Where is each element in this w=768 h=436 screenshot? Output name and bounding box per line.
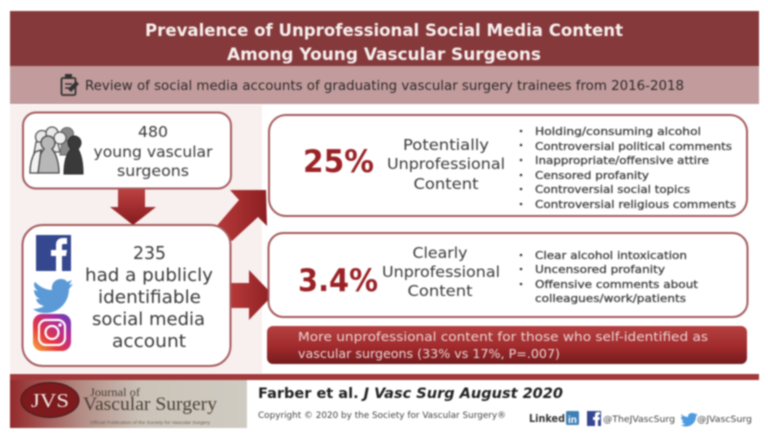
- citation: Farber et al. J Vasc Surg August 2020: [258, 386, 563, 402]
- list: clearly unprofessional items: Uncensored profanity: [535, 263, 666, 276]
- callout: self-identified vascular surgeons: vascular surgeons (33% vs 17%, P=.007): [298, 346, 560, 361]
- list: potentially unprofessional items: Controversial political comments: [535, 140, 732, 153]
- icon: instagram: [33, 314, 71, 351]
- heading: potentially unprofessional content: Potentially: [403, 136, 489, 154]
- list: potentially unprofessional items: [520, 125, 736, 211]
- box: 480 young vascular surgeons: 480: [138, 123, 168, 141]
- list: potentially unprofessional items: Controversial religious comments: [535, 198, 736, 211]
- subtitle band: [10, 66, 759, 104]
- icon: facebook: [36, 235, 71, 271]
- logo: Journal of Vascular Surgery: JVS: [31, 390, 69, 412]
- box: 480 young vascular surgeons: surgeons: [117, 162, 189, 180]
- social handles: @TheJVascSurg: [603, 415, 675, 425]
- title banner: [10, 11, 759, 66]
- stat: 3.4%: 3.4%: [298, 263, 378, 299]
- copyright: Copyright © 2020 by the Society for Vascular Surgery®: [258, 411, 506, 421]
- list: potentially unprofessional items: Censored profanity: [535, 169, 650, 182]
- box: 235 with social media account: 235: [133, 243, 166, 264]
- panel: clearly unprofessional content: [268, 233, 748, 317]
- title banner: Prevalence of Unprofessional Social Media Content: [145, 21, 623, 40]
- box: 235 with social media account: social media: [92, 309, 205, 330]
- box: 480 young vascular surgeons: [23, 112, 231, 188]
- icon: twitter bird: [33, 279, 73, 313]
- heading: clearly unprofessional content: Content: [408, 282, 472, 300]
- box: 235 with social media account: [22, 225, 230, 366]
- heading: clearly unprofessional content: [382, 244, 500, 300]
- title banner: Among Young Vascular Surgeons: [227, 45, 541, 64]
- footer rule: [10, 374, 759, 380]
- heading: potentially unprofessional content: Unprofessional: [387, 155, 505, 173]
- box: 235 with social media account: had a publicly: [85, 265, 213, 286]
- arrow: diagonal up-right: [215, 190, 267, 241]
- list: clearly unprofessional items: [520, 249, 699, 305]
- panel: potentially unprofessional content: [269, 115, 747, 216]
- arrow: down: [110, 188, 156, 225]
- callout: self-identified vascular surgeons: More unprofessional content for those who self-identified as: [298, 329, 708, 344]
- icon: clipboard: [62, 74, 79, 95]
- heading: clearly unprofessional content: Unprofessional: [382, 263, 500, 281]
- heading: clearly unprofessional content: Clearly: [412, 244, 468, 262]
- heading: potentially unprofessional content: Content: [414, 175, 478, 193]
- left panel background: [10, 105, 262, 373]
- subtitle band: Review of social media accounts of graduating vascular surgery trainees from 2016-2018: [85, 79, 684, 94]
- box: 235 with social media account: account: [112, 331, 186, 352]
- heading: potentially unprofessional content: [387, 136, 505, 193]
- icon: linkedin: [529, 411, 579, 426]
- logo: Journal of Vascular Surgery: Journal of: [90, 387, 140, 399]
- list: clearly unprofessional items: Offensive comments about: [535, 278, 699, 291]
- list: potentially unprofessional items: Holding/consuming alcohol: [535, 125, 701, 138]
- icon: linkedin: Linked: [529, 413, 565, 425]
- stat: 25%: 25%: [303, 144, 374, 180]
- logo: Journal of Vascular Surgery: Vascular Surgery: [83, 394, 218, 415]
- icon: twitter small: [681, 413, 698, 426]
- arrow: right: [229, 270, 273, 320]
- box: 235 with social media account: identifiable: [98, 287, 201, 308]
- list: potentially unprofessional items: Inappropriate/offensive attire: [535, 154, 709, 167]
- social handles: [529, 411, 752, 426]
- list: potentially unprofessional items: Controversial social topics: [535, 183, 690, 196]
- logo: Journal of Vascular Surgery: Official Publication of the Society for Vascular Surgery: [90, 420, 211, 425]
- icon: facebook small: [587, 411, 601, 426]
- icon: linkedin: in: [568, 415, 577, 426]
- list: clearly unprofessional items: Clear alcohol intoxication: [535, 249, 687, 262]
- box: 480 young vascular surgeons: young vascular: [94, 143, 213, 161]
- icon: group of people: [30, 127, 83, 174]
- callout: self-identified vascular surgeons: [267, 326, 747, 364]
- list: clearly unprofessional items: colleagues/work/patients: [535, 292, 686, 305]
- social handles: @JVascSurg: [697, 415, 752, 425]
- logo: Journal of Vascular Surgery: [10, 380, 247, 428]
